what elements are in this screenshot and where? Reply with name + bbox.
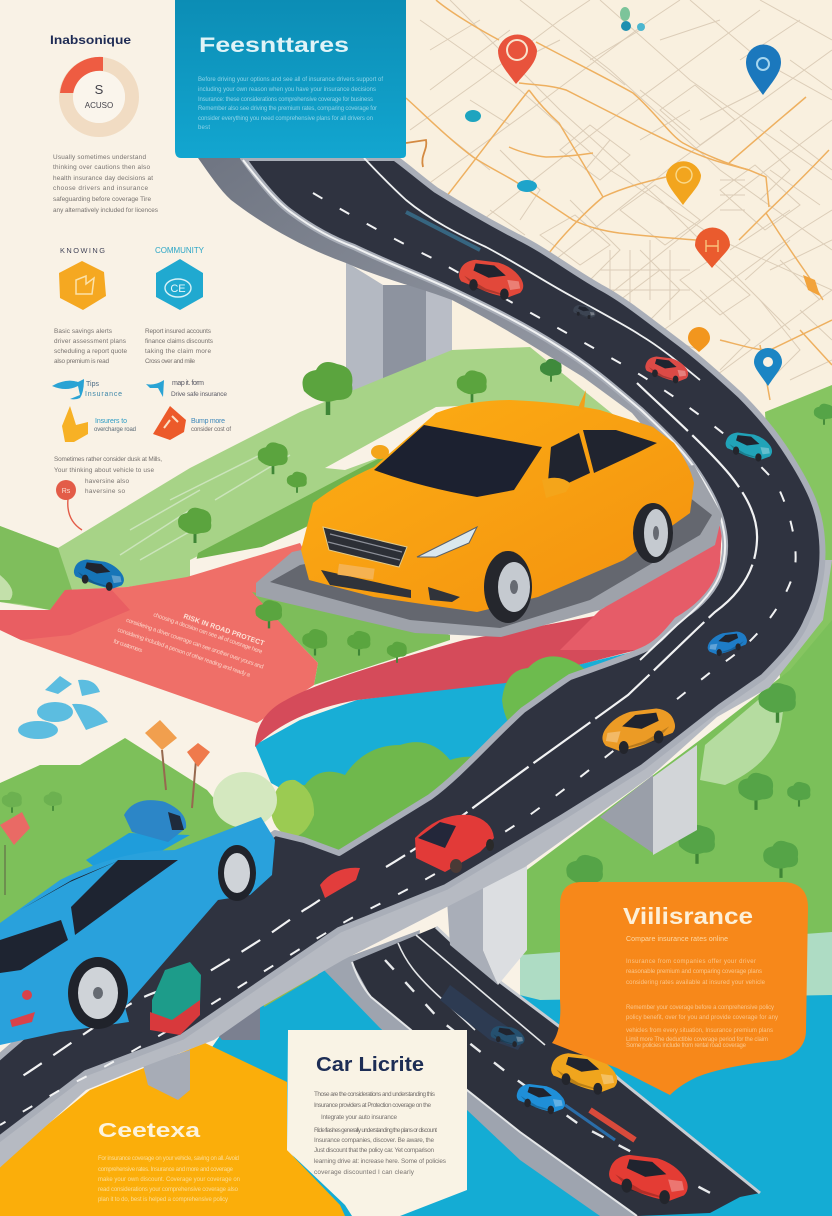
body text: Ride flashes generally understanding the plans or discount [314, 1127, 437, 1134]
body text: Insurance: these considerations comprehensive coverage for business [198, 97, 373, 103]
turntable plate [256, 465, 722, 637]
car: orange, lower right [551, 1053, 617, 1095]
paragraph: left column: Basic savings alerts [54, 328, 112, 335]
body text: policy benefit, over for you and provide coverage for any [626, 1015, 778, 1021]
body text: comprehensive rates. Insurance and more and coverage [98, 1167, 234, 1173]
rear spoiler [578, 390, 586, 410]
car: green and red [150, 962, 201, 1035]
body text: For insurance coverage on your vehicle, saving on all. Avoid [98, 1156, 239, 1162]
heading: donut chart title: Inabsonique [50, 33, 131, 47]
rear wheel [218, 845, 256, 901]
icon: blue wave right [146, 380, 164, 397]
car: red and white [645, 356, 688, 383]
green hills, upper left [0, 347, 640, 610]
rear wheel [633, 503, 673, 563]
label: right column: COMMUNITY [155, 246, 205, 255]
front wheel [68, 957, 128, 1029]
subheading: Compare insurance rates online [626, 936, 728, 943]
trees on right field [566, 404, 832, 894]
text: blue wave right: map it. form [172, 380, 204, 387]
paragraph: across column: Your thinking about vehicle to use [54, 467, 154, 474]
body text: Insurance providers at Protection coverage on the [314, 1102, 431, 1109]
lower bumper [321, 570, 411, 598]
headlight [417, 527, 477, 557]
text on coral band: RISK IN ROAD PROTECT [182, 613, 266, 648]
centre dashes [0, 193, 796, 1125]
body text: Integrate your auto insurance [321, 1114, 397, 1121]
text: orange house: consider cost of [191, 427, 231, 433]
front wheel [484, 551, 532, 623]
text: blue wave left: Tips [86, 381, 99, 388]
icon: blue hexagon: CE [170, 283, 186, 295]
coral band under plate [255, 470, 722, 747]
grille [323, 527, 407, 567]
text: blue wave left: Insurance [85, 391, 122, 398]
paragraph: donut notes: Usually sometimes understand [53, 154, 146, 161]
paragraph: donut notes: safeguarding before coverage Tire [53, 196, 151, 203]
big blue car [0, 800, 275, 1045]
text on coral band: for customers [113, 639, 143, 654]
right green field [520, 404, 832, 1010]
icon: blue wave left [52, 379, 84, 399]
paragraph: left column [54, 328, 127, 365]
body text [626, 959, 778, 1049]
map pins [465, 7, 782, 386]
label: left column: KNOWING [60, 246, 105, 255]
icon: red pin with tail [56, 480, 82, 530]
signposts [0, 720, 210, 895]
body text: learning drive at: increase here. Some of policies [314, 1158, 446, 1165]
paragraph: left column: scheduling a report quote [54, 348, 127, 355]
body text: Remember also see driving the premium rates, comparing coverage for [198, 106, 377, 112]
panel: Ceetexa [98, 1120, 240, 1203]
donut chart: ACUSO [85, 101, 113, 110]
car: red, lower mid [415, 815, 494, 873]
car: teal [726, 433, 772, 462]
lower intake [428, 587, 460, 602]
long lane line [386, 383, 757, 867]
paragraph: donut notes [53, 154, 158, 214]
body text [314, 1091, 446, 1176]
text on coral band: considering a driver coverage can see another over yours and [125, 618, 264, 671]
text: yellow thumb: Insurers to [95, 418, 127, 425]
car: blue, lower right [517, 1084, 565, 1114]
upper thin line [364, 158, 700, 380]
paragraph: left column: driver assessment plans [54, 338, 126, 345]
icon: yellow thumb [62, 406, 88, 442]
orange wedge, bottom left [0, 1043, 345, 1216]
body text: make your own discount. Coverage your coverage on [98, 1177, 240, 1183]
paragraph: right column: Cross over and mile [145, 358, 195, 365]
car: blue, mid right [708, 631, 747, 656]
text: yellow thumb [94, 418, 136, 433]
heading: Viilisrance [623, 903, 753, 929]
big yellow car [301, 390, 694, 623]
paragraph: donut notes: choose drivers and insurance [53, 185, 148, 192]
car: red, lower right [609, 1155, 688, 1204]
body text: consider everything you need comprehensive plans for all drivers on [198, 116, 373, 122]
paragraph: right column: taking the claim more [145, 348, 211, 355]
body text: Remember your coverage before a comprehensive policy [626, 1005, 774, 1011]
paragraph: donut notes: health insurance day decisions at [53, 175, 153, 182]
paragraph: left column: also premium is read [54, 358, 109, 365]
cars on road [74, 260, 772, 1204]
pin: orange [695, 228, 730, 268]
car: red, top [459, 260, 523, 300]
toy on roof [124, 800, 186, 842]
lower left green hills [0, 738, 277, 960]
trees lower left [2, 791, 62, 813]
text: yellow thumb: overcharge road [94, 427, 136, 433]
map markers [465, 7, 645, 192]
donut chart: S [95, 82, 104, 97]
body text: Just discount that the policy car. Yet comparison [314, 1147, 434, 1154]
body text: read considerations your comprehensive coverage also [98, 1187, 239, 1193]
bird-like marks [18, 676, 108, 739]
green mound under plate [252, 592, 450, 685]
text: blue wave right [171, 380, 227, 398]
body text: coverage discounted I can clearly [314, 1169, 415, 1176]
river trees [271, 656, 592, 855]
coral band [0, 543, 340, 723]
car: orange, mid [602, 708, 675, 754]
body text: best [198, 125, 210, 131]
text on coral band: choosing a decision can see all of coverage here [152, 612, 264, 656]
car: blue, left [74, 560, 124, 591]
lighter coral right of plate [560, 483, 722, 650]
trees under plate [255, 600, 407, 663]
body text: Some policies include from rental road coverage [626, 1043, 747, 1049]
pin: yellow [666, 161, 701, 205]
panel: Features [175, 0, 406, 158]
second road, lower [321, 927, 760, 1216]
body text: Limit more The deductible coverage period for the claim [626, 1037, 768, 1043]
body text: vehicles from every situation, Insurance premium plans [626, 1028, 773, 1034]
near mirror [371, 445, 389, 459]
body text: Insurance from companies offer your driver [626, 959, 756, 965]
car body [0, 817, 275, 1045]
paragraph: across column: Sometimes rather consider dusk at Mills, [54, 456, 162, 463]
body text [198, 77, 383, 131]
pillar: center bottom [214, 1003, 260, 1040]
body text: Before driving your options and see all of insurance drivers support of [198, 77, 383, 83]
body text: Those are the considerations and understanding this [314, 1091, 435, 1098]
body text: reasonable premium and comparing coverage plans [626, 969, 762, 975]
text: orange house [191, 418, 231, 433]
body text: plan it to do, best is helped a comprehensive policy [98, 1197, 228, 1203]
pin: small blue [754, 348, 782, 386]
pin: small orange [688, 327, 710, 352]
panel: Vigilance callout [552, 882, 808, 1095]
panel: Car Licrite [287, 1030, 467, 1216]
side front window [547, 433, 590, 493]
heading: Car Licrite [316, 1054, 424, 1076]
body text: including your own reason when you have your insurance decisions [198, 87, 376, 93]
number plate [337, 564, 375, 580]
pin: blue [746, 44, 781, 95]
text: blue wave right: Drive safe insurance [171, 391, 227, 398]
text: blue wave left [85, 381, 122, 398]
icon: blue hexagon [156, 259, 203, 310]
pillar: bottom left [143, 1050, 190, 1100]
outer deck, lower [0, 560, 832, 1172]
side rear window [583, 430, 657, 473]
car body [301, 400, 694, 612]
icon: orange hexagon [59, 261, 106, 310]
text on coral band: considering included a person of other reading and ready a [116, 627, 251, 679]
pillar: top [346, 262, 452, 395]
pillar: right [600, 745, 697, 855]
heading: Ceetexa [98, 1120, 201, 1142]
tail lights [10, 990, 35, 1027]
car: small red [320, 868, 360, 898]
paragraph: donut notes: thinking over cautions then also [53, 164, 150, 171]
paragraph: right column [145, 328, 213, 365]
icon: orange house [153, 406, 186, 440]
trees on upper hill [178, 359, 562, 543]
olive sliver [264, 967, 318, 1007]
inner edge line [243, 160, 725, 660]
roof stripe [20, 860, 120, 910]
blue water, bottom [210, 960, 832, 1216]
text: red pin [85, 478, 129, 495]
door mirror [542, 478, 571, 498]
outer deck, upper left [198, 158, 722, 527]
text on coral band [113, 594, 272, 693]
paragraph: right column: Report insured accounts [145, 328, 211, 335]
donut chart [60, 57, 132, 130]
text: red pin: haversine also [85, 478, 129, 485]
windshield [374, 425, 542, 497]
windscreen [71, 860, 178, 935]
body text: considering rates available at insured your vehicle [626, 980, 766, 986]
paragraph: right column: finance claims discounts [145, 338, 213, 345]
body text [98, 1156, 240, 1203]
heading: Feesnttares [199, 34, 349, 57]
paragraph: donut notes: any alternatively included for licences [53, 207, 158, 214]
pillar: middle [447, 860, 527, 985]
map background with streets [406, 0, 832, 460]
text: red pin: haversine so [85, 488, 125, 495]
paragraph: across column [54, 456, 162, 474]
speed blur car [440, 985, 525, 1050]
streak on upper road [406, 212, 480, 250]
body text: Insurance companies, discover. Be aware, the [314, 1137, 434, 1144]
green field right of the road [765, 385, 832, 680]
text: orange house: Bump more [191, 418, 225, 425]
rear window [0, 920, 68, 973]
car: small dark [573, 305, 596, 319]
pin: red [498, 34, 537, 84]
lane line, lower left [21, 880, 350, 1077]
river [255, 650, 660, 810]
icon: red pin with tail: Rs [62, 488, 71, 495]
